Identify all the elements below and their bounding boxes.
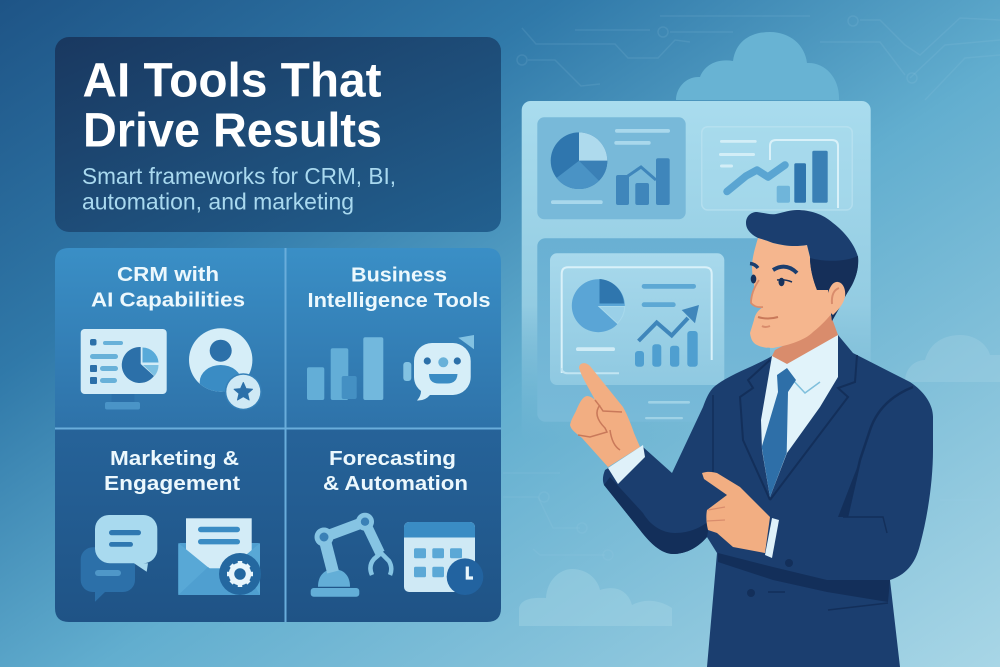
panel: four tool categories [55, 248, 501, 622]
cloud: right [905, 335, 1000, 382]
subtitle [82, 163, 396, 214]
heading: Marketing: Engagement [104, 472, 240, 495]
heading: Marketing [104, 447, 240, 495]
neck [772, 313, 838, 364]
face [750, 238, 836, 348]
presenter figure [570, 210, 933, 667]
icon: bar chart [307, 337, 383, 400]
background clouds [519, 32, 1000, 626]
icon: CRM monitor dashboard [81, 329, 167, 410]
section: Marketing & Engagement [81, 447, 261, 602]
heading: Forecasting: Forecasting [329, 447, 456, 470]
icon: chatbot speech bubble [403, 335, 474, 401]
icon: calendar with clock [404, 522, 483, 595]
subtitle: Smart frameworks for CRM, BI, [82, 163, 396, 189]
heading: Forecasting [323, 447, 468, 495]
background circuit pattern [503, 16, 1000, 560]
necktie [762, 368, 796, 497]
lower hand [702, 472, 770, 553]
heading: Forecasting: & Automation [323, 472, 468, 495]
heading: BI: Intelligence Tools [308, 289, 490, 312]
chart: bars with line [616, 158, 670, 205]
suit jacket [603, 335, 933, 667]
title: Drive Results [83, 104, 382, 158]
shirt cuff, right arm [765, 518, 779, 558]
jacket buttons [747, 559, 793, 597]
shirt cuff, left arm [608, 445, 645, 484]
title: AI Tools That [82, 54, 382, 108]
panel: dashboard screen [522, 101, 871, 441]
heading: CRM [91, 263, 245, 312]
jacket lapels [713, 355, 913, 610]
section: Forecasting & Automation [311, 447, 483, 597]
heading: CRM: AI Capabilities [91, 288, 245, 312]
heading: Marketing: Marketing & [110, 447, 239, 470]
collar line [790, 377, 820, 393]
chart: pie [551, 132, 607, 189]
fold shadow [718, 553, 890, 602]
heading: BI: Business [351, 264, 447, 286]
icon: chat bubbles [81, 515, 157, 602]
heading: BI [308, 264, 490, 312]
card: outlined trend chart [702, 127, 852, 210]
title panel [55, 37, 501, 232]
icon: robotic arm [311, 513, 391, 597]
card: large analytics backing panel [537, 238, 770, 422]
cloud: bottom left [519, 569, 672, 626]
icon: customer avatar with star [189, 328, 262, 410]
section: Business Intelligence Tools [307, 264, 490, 401]
sleeve shadow [604, 477, 710, 554]
heading: CRM: CRM with [117, 263, 219, 286]
shirt [761, 335, 838, 497]
ear [827, 282, 845, 315]
chart: rising arrow and bars [635, 305, 699, 367]
section: CRM with AI Capabilities [81, 263, 262, 410]
hair [746, 210, 858, 321]
subtitle: automation, and marketing [82, 188, 354, 214]
eyes, brows, nose, mouth [750, 264, 797, 327]
chart: pie [572, 279, 625, 332]
chart: trend line and bars [727, 151, 828, 203]
title [82, 54, 382, 158]
cloud: top right [676, 32, 839, 100]
card: pie and bar chart [537, 117, 686, 219]
pointing hand [570, 363, 640, 467]
icon: envelope with gear [178, 518, 261, 595]
